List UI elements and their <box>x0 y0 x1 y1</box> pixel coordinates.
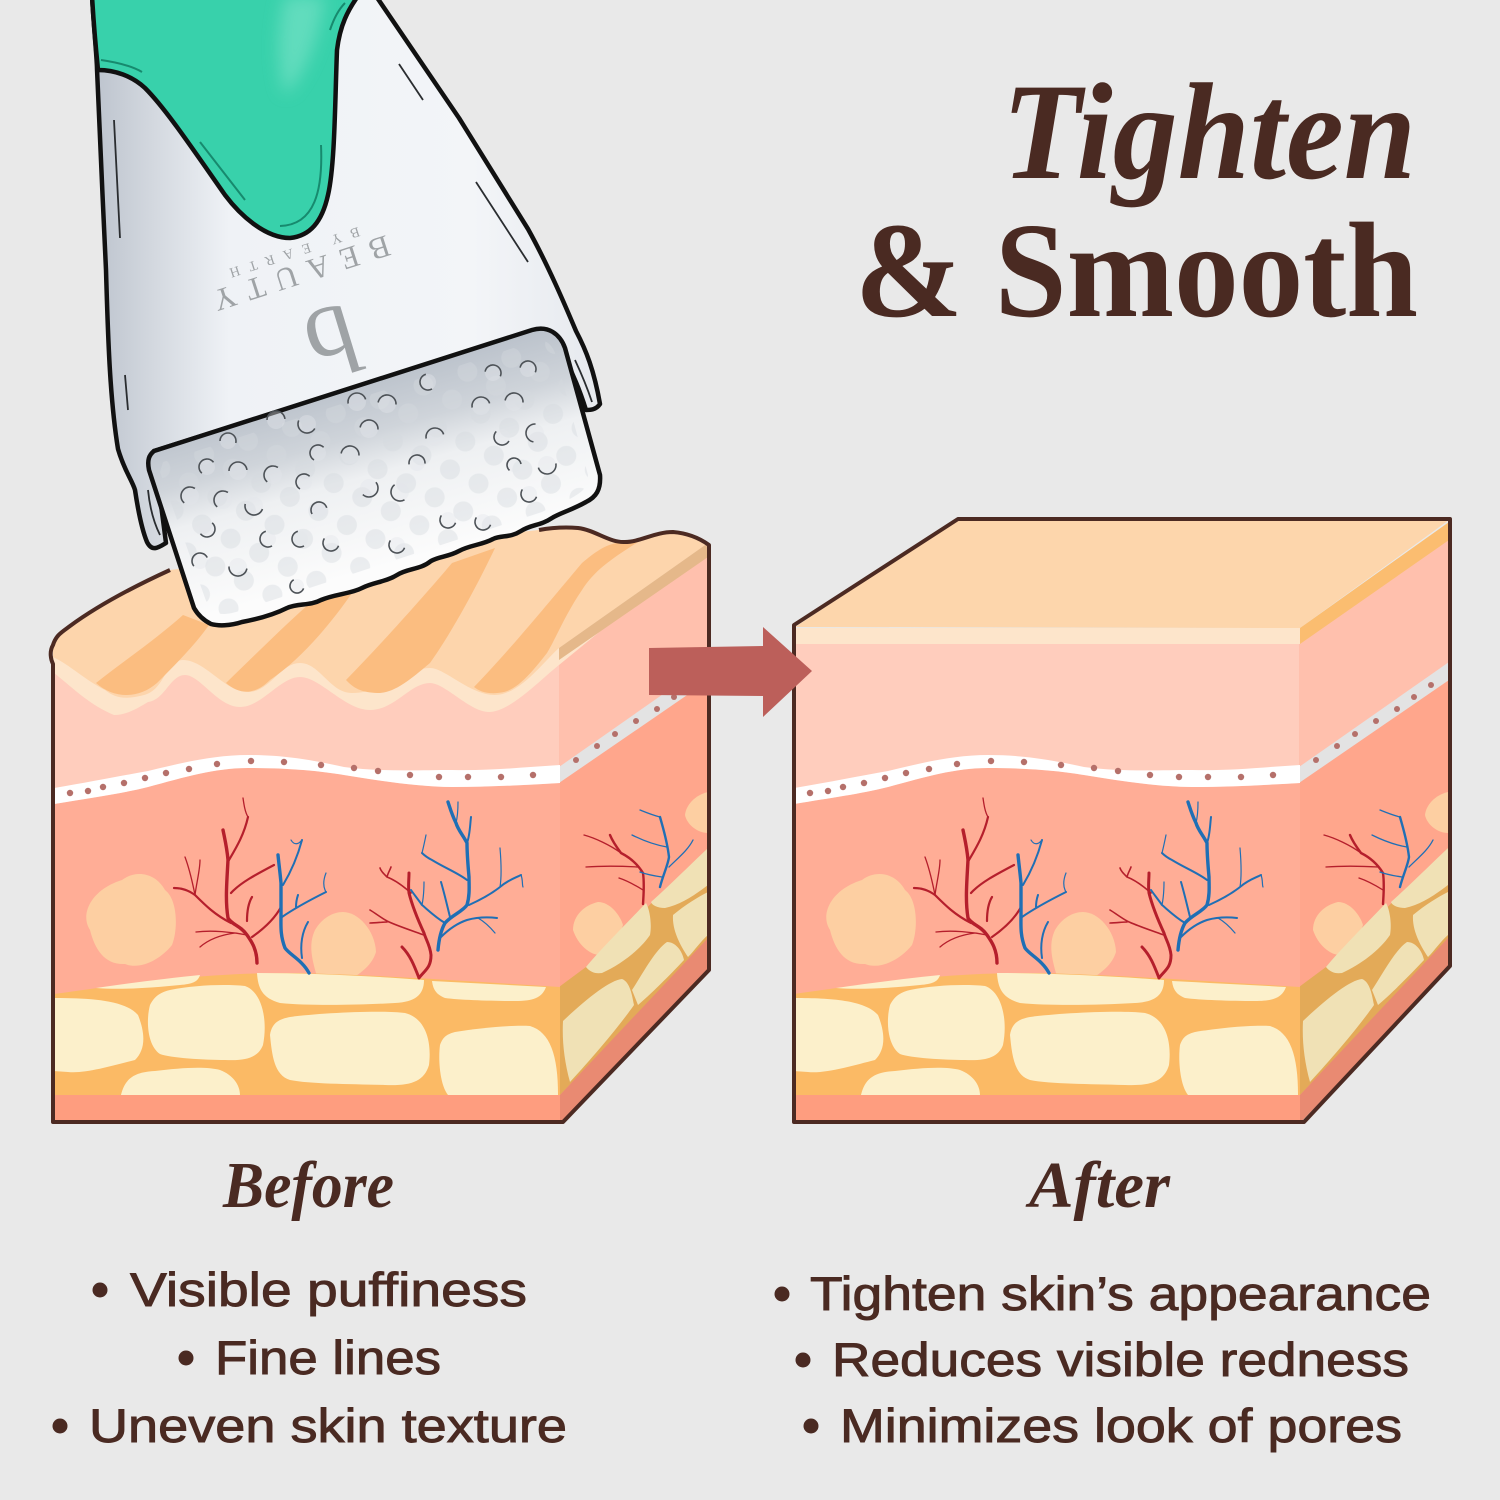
dermis, vessels and fat layers <box>54 662 709 1123</box>
title <box>855 55 1418 346</box>
wrinkled skin surface <box>53 528 708 715</box>
block outline <box>51 528 709 1122</box>
handle body with side lips <box>92 0 600 548</box>
icon: ice roller <box>92 0 600 625</box>
epidermis front and side <box>795 535 1449 810</box>
grip highlight <box>279 0 325 95</box>
grip shading lines <box>101 3 345 226</box>
panel: after skin cross-section <box>794 519 1450 1123</box>
smooth skin surface <box>795 520 1449 644</box>
roller dimple pattern <box>160 340 588 614</box>
text block: before list <box>52 1263 567 1452</box>
title line 1: Tighten <box>1002 55 1416 208</box>
text block: after list <box>774 1267 1431 1452</box>
roller dimple arcs <box>177 360 557 595</box>
bullet item: Reduces visible redness <box>832 1333 1409 1386</box>
logo wordmark: BEAUTY <box>209 228 395 318</box>
block outline <box>794 519 1450 1122</box>
heading: after: After <box>1025 1149 1171 1222</box>
bullet item: Visible puffiness <box>130 1263 527 1316</box>
bullet item: Uneven skin texture <box>89 1399 567 1452</box>
title line 2: & Smooth <box>855 196 1418 346</box>
handle highlights <box>114 64 592 535</box>
logo mark: b <box>292 281 372 402</box>
brand logo on handle <box>209 223 395 402</box>
epidermis front and side <box>54 545 708 810</box>
heading: before: Before <box>222 1149 394 1222</box>
arrow from before to after <box>649 627 812 717</box>
bullet item: Minimizes look of pores <box>840 1399 1402 1452</box>
bullet item: Tighten skin’s appearance <box>810 1267 1431 1320</box>
bullet item: Fine lines <box>215 1331 441 1384</box>
dermis, vessels and fat layers <box>794 662 1449 1123</box>
panel: before skin cross-section <box>51 528 709 1123</box>
green grip <box>92 0 358 238</box>
logo tagline: BY EARTH <box>227 223 361 279</box>
roller head <box>148 329 600 625</box>
